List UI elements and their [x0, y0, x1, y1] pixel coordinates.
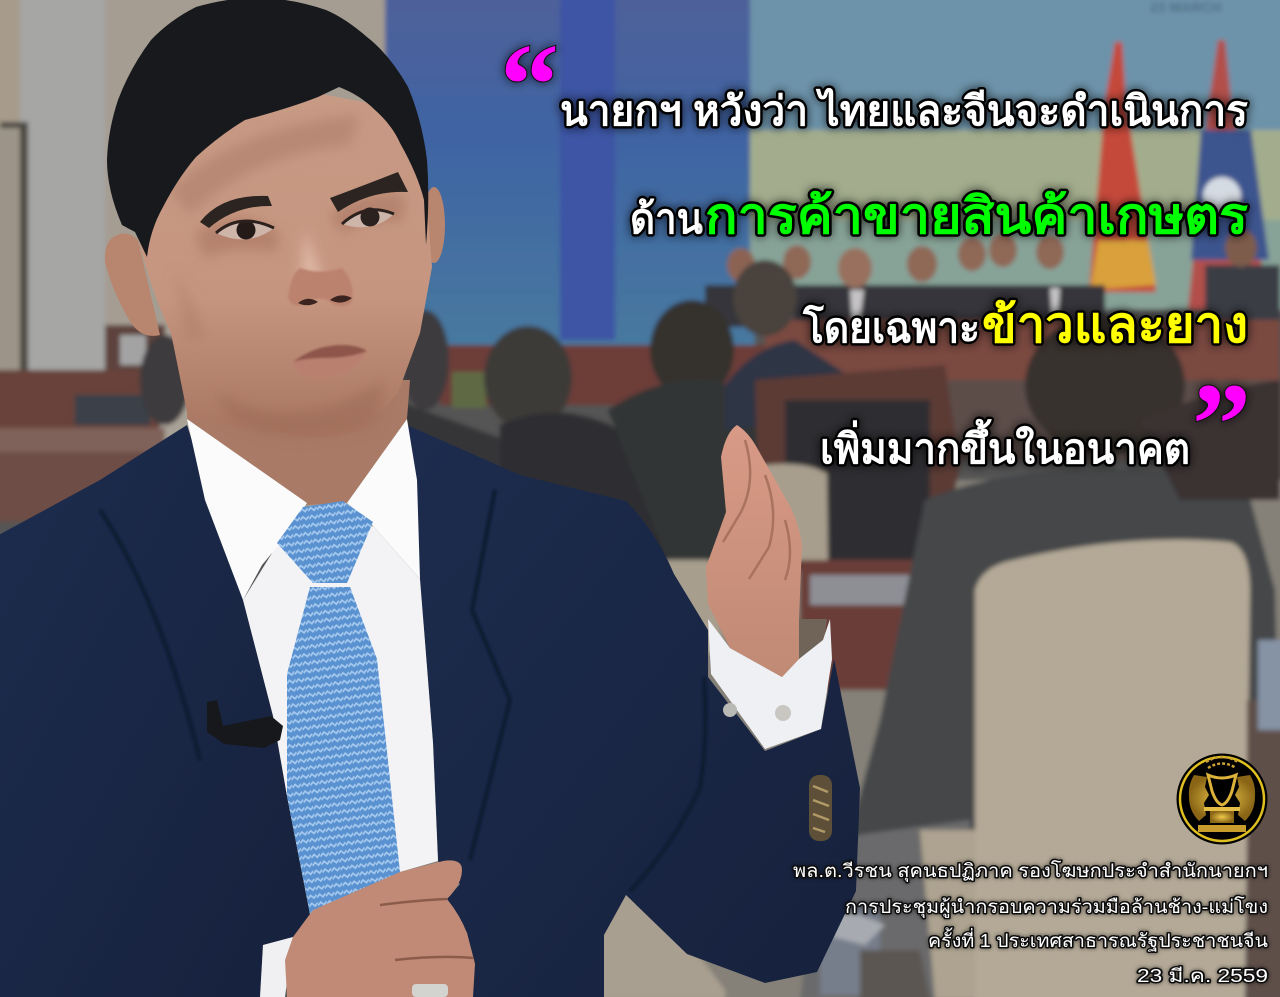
watch [799, 619, 827, 661]
line 3 yellow highlight: ข้าวและยาง [982, 297, 1248, 353]
attribution text [793, 860, 1268, 986]
eyebrow right [330, 172, 408, 212]
beige side chairs [745, 464, 828, 561]
jacket right side with sleeve [407, 425, 860, 997]
ear right [423, 187, 445, 263]
wall left [0, 0, 390, 510]
dark foreground suit [1025, 315, 1185, 455]
cuff buttons [723, 703, 737, 717]
grey legs [800, 820, 970, 997]
shirt cuff [708, 619, 832, 749]
chair base left [595, 870, 725, 997]
teal backdrop [750, 0, 1280, 135]
foreground chair [975, 540, 1250, 997]
shirt collar right [347, 419, 420, 579]
ear left [105, 233, 160, 336]
shirt collar left [187, 419, 307, 600]
line 3 white: โดยเฉพาะ [802, 304, 980, 351]
mouth [293, 345, 367, 378]
tie [277, 501, 400, 914]
line 2 green highlight: การค้าขายสินค้าเกษตร [705, 188, 1248, 244]
shirt [243, 526, 438, 914]
seal: Office of the Prime Minister [1176, 754, 1268, 844]
flags [1089, 42, 1156, 292]
hair [107, 0, 428, 257]
person: spokesman in navy suit [0, 0, 860, 997]
line 2 white: ด้าน [630, 196, 703, 242]
nose [288, 268, 353, 307]
tables [0, 370, 160, 432]
attribution line 2: การประชุมผู้นำกรอบความร่วมมือล้านช้าง-แม่โขง [845, 896, 1268, 919]
ring [412, 984, 448, 997]
jacket folds [100, 490, 705, 891]
eyebrow left [200, 196, 272, 228]
attribution line 3: ครั้งที่ 1 ประเทศสาธารณรัฐประชาชนจีน [928, 927, 1268, 952]
quote: main text [500, 19, 1251, 490]
jacket left side [0, 425, 310, 997]
lapel microphone [207, 700, 283, 748]
nostrils [298, 295, 352, 305]
opening quotation mark: “ [500, 19, 559, 150]
line 1: นายกฯ หวังว่า ไทยและจีนจะดำเนินการ [560, 87, 1248, 134]
lower hand [285, 860, 475, 997]
seated delegates backs [484, 326, 572, 430]
left shirt cuff [260, 937, 293, 997]
white shirts far delegates [785, 288, 1060, 320]
face [135, 90, 432, 437]
sleeve pin [809, 775, 832, 841]
eye left [216, 220, 274, 240]
eye right [342, 208, 394, 227]
closing quotation mark: ” [1192, 359, 1251, 490]
red table [800, 560, 920, 690]
far delegates [705, 285, 1105, 327]
neck [187, 380, 410, 505]
red chair back [755, 365, 960, 565]
blue backdrop [385, 0, 755, 350]
attribution line 1: พล.ต.วีรชน สุคนธปฏิภาค รองโฆษกประจำสำนักนายกฯ [793, 860, 1268, 883]
face shading [170, 115, 405, 436]
floor / desk area [400, 480, 1280, 997]
raised hand [706, 425, 802, 677]
line 4: เพิ่มมากขึ้นในอนาคต [820, 419, 1190, 472]
attribution date: 23 มี.ค. 2559 [1137, 965, 1268, 986]
